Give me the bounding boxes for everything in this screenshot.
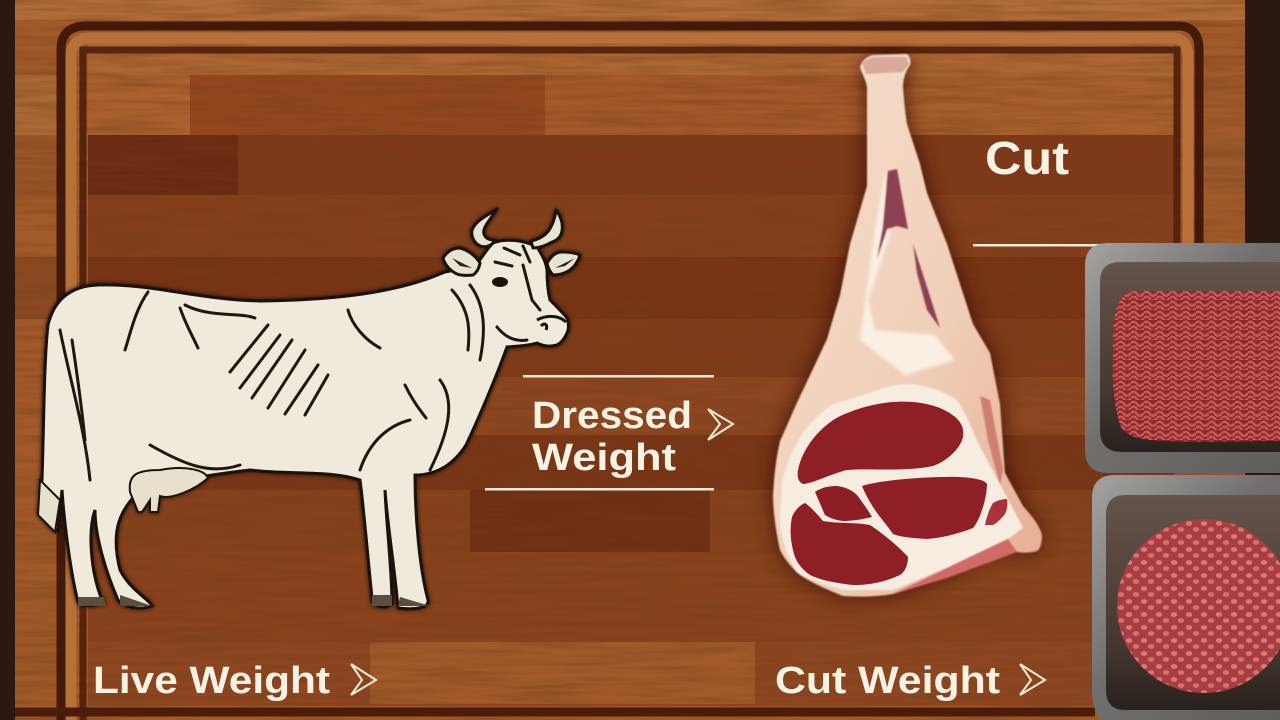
meat cross-section (780, 384, 1023, 594)
label: Dressed Weight (485, 375, 733, 490)
icon: tray of ground beef (1085, 243, 1280, 473)
icon: cow markings (60, 246, 540, 480)
label: Dressed Weight: Weight (532, 437, 676, 479)
icon: beef hindquarter (773, 54, 1042, 597)
label: Cut (973, 132, 1103, 246)
label: Cut Weight: Cut Weight (775, 660, 1000, 702)
label: Cut: Cut (985, 132, 1069, 184)
icon: tray of beef patty (1092, 475, 1280, 720)
label: Live Weight: Live Weight (93, 660, 330, 702)
label: Dressed Weight: Dressed (532, 395, 692, 437)
icon: cow illustration (38, 209, 580, 609)
